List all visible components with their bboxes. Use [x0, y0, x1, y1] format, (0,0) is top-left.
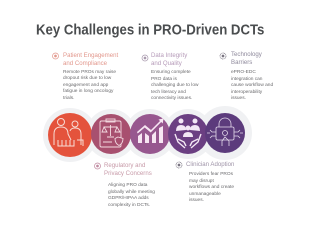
icon: rising bar chart — [130, 114, 170, 154]
text: technology barriers — [231, 70, 273, 101]
icon: clipboard with scales — [91, 114, 131, 154]
icon: hands holding people — [168, 114, 208, 154]
text: clinician adoption — [189, 172, 234, 203]
text: clinician adoption: issues. — [189, 198, 204, 203]
heading: data integrity: and Quality — [151, 60, 182, 67]
title: Key Challenges in PRO-Driven DCTs — [36, 21, 264, 38]
heading: regulatory: Privacy Concerns — [104, 170, 152, 177]
text: regulatory: globally while meeting — [108, 190, 155, 194]
text: regulatory: Aligning PRO data — [108, 183, 147, 188]
heading: technology barriers: Technology — [231, 51, 262, 58]
bullet icon: clinician — [176, 162, 182, 168]
text: regulatory — [108, 182, 155, 208]
text: data integrity: challenging due to low — [151, 83, 198, 88]
heading: patient engagement: Patient Engagement — [63, 52, 118, 59]
text: patient engagement: dropout risk due to low — [63, 76, 111, 81]
heading: data integrity — [151, 52, 188, 67]
bullet icon: data integrity — [142, 55, 148, 61]
text: clinician adoption: unmanageable — [189, 192, 221, 196]
text: technology barriers: cause workflow and — [231, 83, 273, 88]
text: technology barriers: ePRO-EDC — [231, 70, 256, 75]
circle halos — [43, 106, 252, 162]
heading: patient engagement: and Compliance — [63, 60, 107, 67]
text: data integrity: PRO data is — [151, 76, 177, 82]
bullet icon: patient engagement — [52, 53, 58, 59]
text: patient engagement: engagement and app — [63, 82, 108, 88]
text: data integrity — [151, 70, 198, 101]
text: technology barriers: issues. — [231, 96, 246, 101]
bullet icon: regulatory — [94, 163, 100, 169]
text: technology barriers: interoperability — [231, 90, 262, 94]
text: data integrity: connectivity issues. — [151, 96, 192, 101]
text: patient engagement — [63, 70, 116, 100]
bullet icon: technology — [220, 53, 226, 59]
icon: lock with fingerprint — [205, 113, 245, 153]
text: patient engagement: trials. — [63, 96, 74, 100]
text: patient engagement: Remote PROs may raise — [63, 70, 116, 74]
heading: regulatory: Regulatory and — [104, 162, 145, 169]
text: patient engagement: fatigue in long oncology — [63, 89, 113, 94]
text: technology barriers: integration can — [231, 76, 262, 82]
heading: patient engagement — [63, 52, 118, 67]
text: clinician adoption: may disrupt — [189, 178, 214, 184]
heading: regulatory — [104, 162, 152, 177]
text: clinician adoption: Providers fear PROs — [189, 172, 233, 177]
heading: clinician adoption: Clinician Adoption — [186, 161, 234, 168]
text: regulatory: complexity in DCTs. — [108, 202, 150, 208]
heading: technology barriers — [231, 51, 262, 66]
text: regulatory: GDPR/HIPAA adds — [108, 196, 149, 201]
heading: technology barriers: Barriers — [231, 59, 252, 66]
text: data integrity: Ensuring complete — [151, 70, 191, 75]
text: clinician adoption: workflows and create — [189, 185, 234, 190]
icon: patient and caregiver — [48, 113, 92, 157]
heading: data integrity: Data Integrity — [151, 52, 187, 59]
text: data integrity: tech literacy and — [151, 90, 186, 94]
